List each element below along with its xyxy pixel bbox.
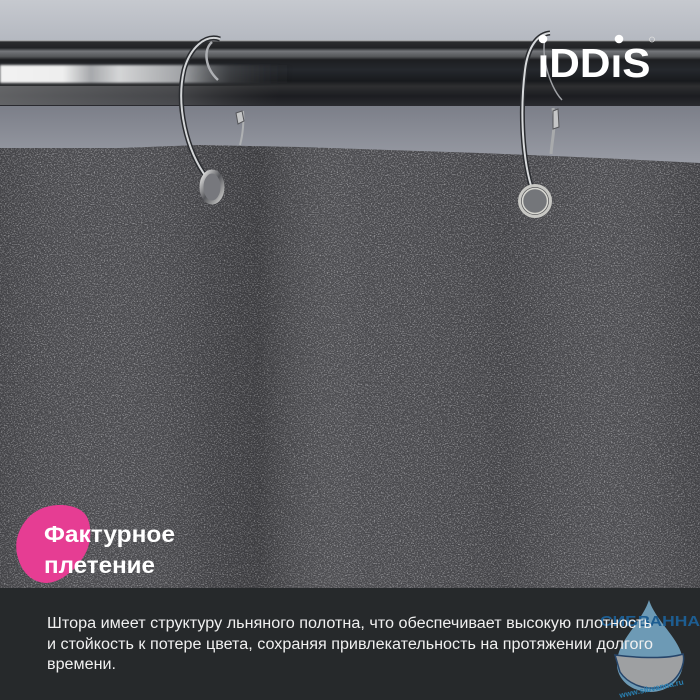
icon: left curtain ring: [181, 38, 244, 203]
heading line 2: плетение: [44, 552, 155, 578]
icon: right curtain ring: [518, 33, 562, 218]
photo: linen curtain: [0, 140, 700, 600]
watermark: bathtub drop: www.sibvanna.ru: [618, 678, 685, 700]
body text: [47, 615, 653, 673]
heading: Фактурное: [44, 521, 175, 547]
logo: IDDIS: ıDDıS: [538, 40, 650, 86]
photo: wall background: [0, 0, 700, 165]
body text: Штора имеет структуру льняного полотна, что обеспечивает высокую плотность: [47, 615, 652, 632]
watermark: bathtub drop: СИБВАННА: [600, 613, 700, 630]
body text: и стойкость к потере цвета, сохраняя привлекательность на протяжении долгого: [47, 636, 653, 653]
photo: curtain rod: [0, 40, 700, 106]
pink blob: [16, 505, 90, 583]
text panel: [0, 588, 700, 700]
watermark: bathtub drop: [600, 600, 700, 700]
body text: времени.: [47, 656, 116, 673]
